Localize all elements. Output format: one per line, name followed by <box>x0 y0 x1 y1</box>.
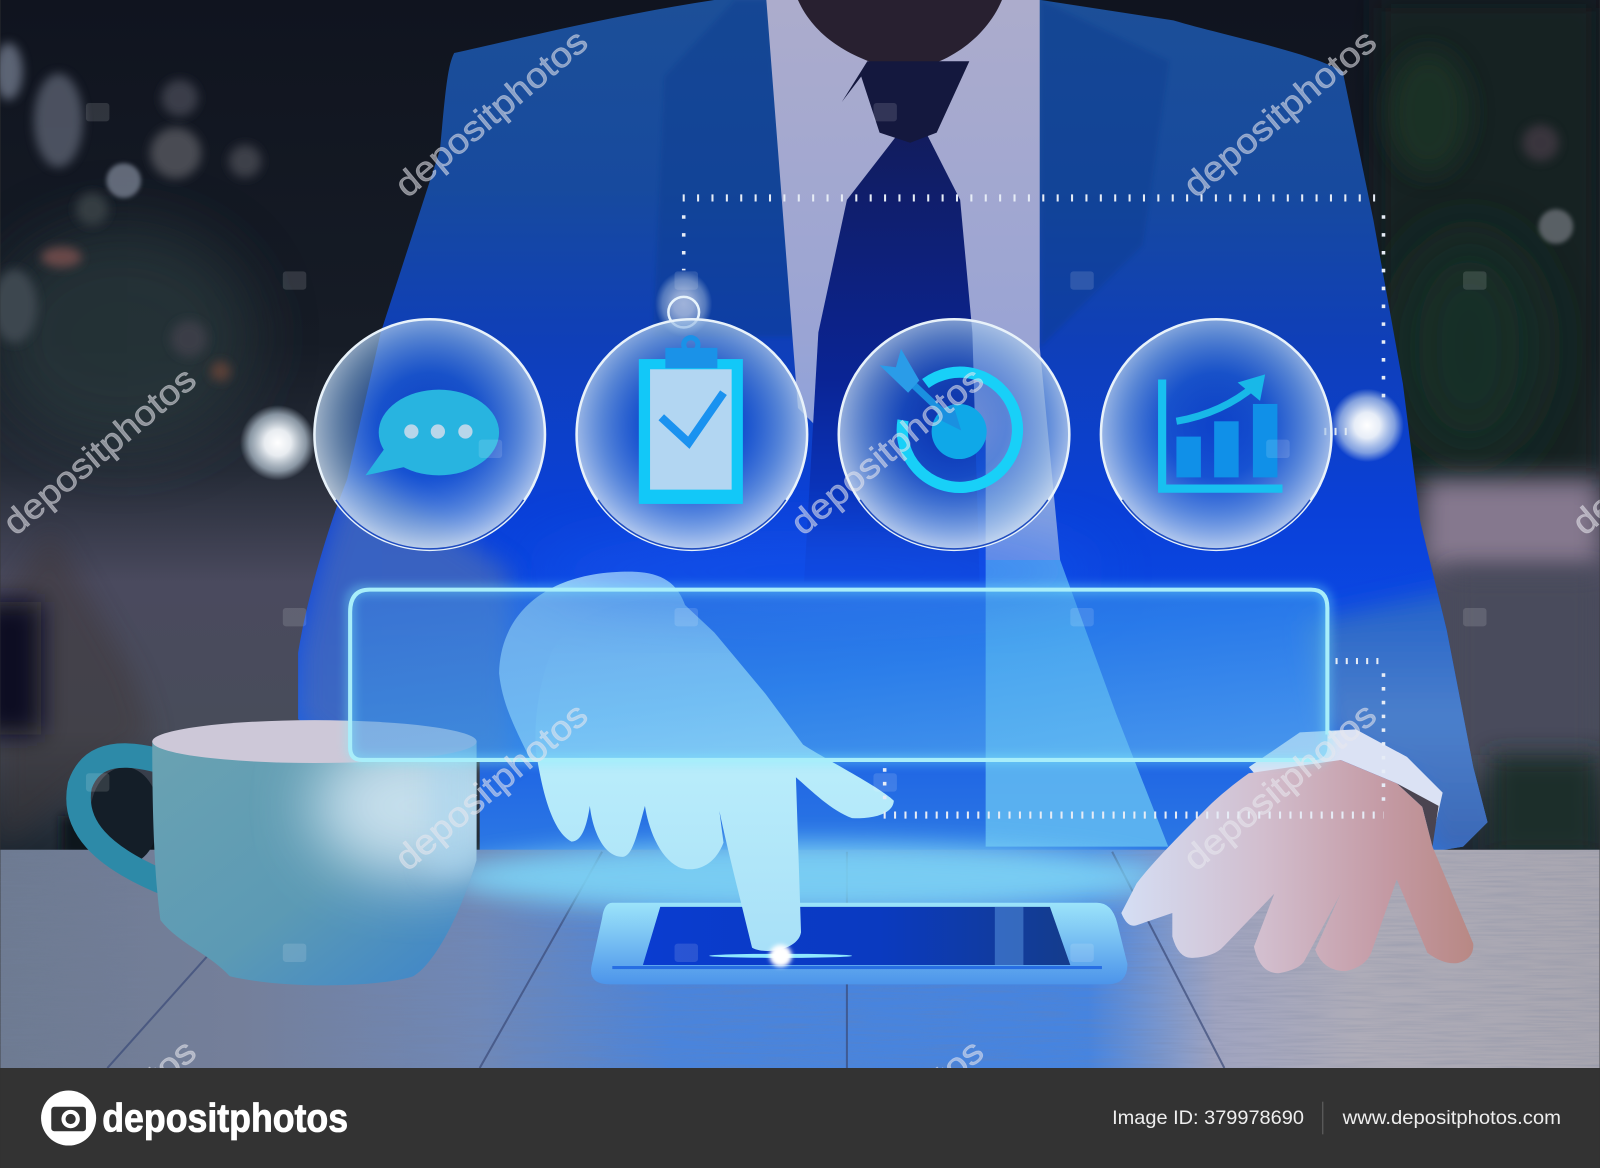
touch spark <box>709 945 852 967</box>
tie <box>804 61 980 581</box>
icon: speech bubble <box>365 390 499 475</box>
watermarks: depositphotos <box>784 360 991 543</box>
sleeve shading <box>298 479 1510 857</box>
translucent shirt streak <box>986 560 1168 847</box>
suit jacket <box>298 0 1488 852</box>
dotted connector lines <box>683 198 1386 815</box>
table <box>0 843 1600 1068</box>
beard <box>798 0 1002 62</box>
icon badge: target <box>839 319 1069 550</box>
text panel <box>350 590 1327 760</box>
watermarks: depositphotos <box>388 23 595 205</box>
website: www.depositphotos.com <box>1342 1107 1561 1129</box>
icon badge: growth chart <box>1101 319 1331 550</box>
divider <box>1322 1102 1323 1134</box>
glow node top <box>655 271 712 337</box>
icon: clipboard with check <box>639 338 743 504</box>
left shirt cuff and pointing hand <box>499 572 894 951</box>
shirt <box>766 0 1060 560</box>
image id: Image ID: 379978690 <box>1112 1107 1304 1129</box>
lapels <box>653 0 1169 347</box>
coffee cup <box>66 720 477 986</box>
blurred garden background <box>0 0 1600 857</box>
glow node right <box>1330 389 1404 462</box>
icon badge: chat <box>314 319 545 550</box>
icon: bar chart with arrow <box>1162 374 1283 489</box>
watermarks: depositphotos <box>0 360 204 543</box>
watermarks: depositphotos <box>1177 23 1384 205</box>
icon: target with arrow <box>880 349 1018 487</box>
phone <box>591 903 1127 984</box>
logo <box>41 1090 348 1146</box>
icon badge: checklist <box>577 319 807 550</box>
logo: depositphotos <box>102 1096 348 1140</box>
watermarks: depositphotos <box>1177 696 1384 878</box>
footer bar <box>0 1068 1600 1168</box>
watermarks: depositphotos <box>388 696 595 878</box>
blue holographic haze <box>531 530 1102 612</box>
small camera watermark marks <box>86 103 1487 962</box>
glow node left <box>240 405 315 480</box>
right shirt cuff and hand <box>1121 729 1473 973</box>
